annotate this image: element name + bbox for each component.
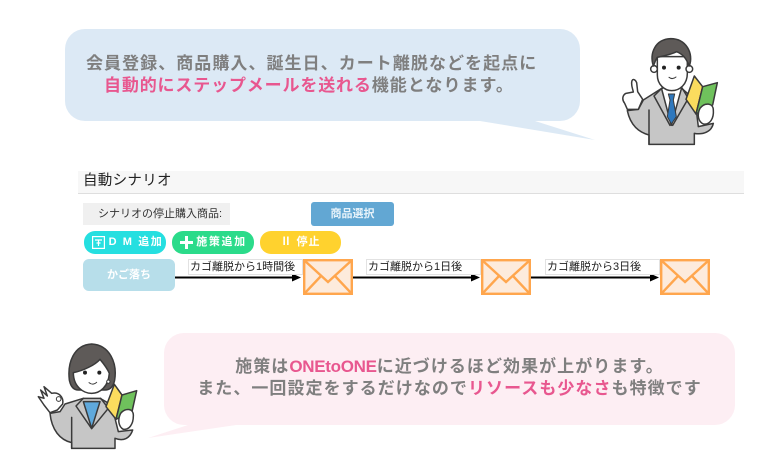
node: cart abandonment: かご落ち bbox=[107, 269, 151, 281]
label: 1 day later: カゴ離脱から1日後 bbox=[368, 261, 462, 273]
text: bottom message: また、一回設定をするだけなのでリソースも少なさも特徴です bbox=[197, 379, 702, 398]
button: add DM: D M 追加 bbox=[109, 236, 163, 248]
button: product select: 商品選択 bbox=[330, 208, 374, 220]
arrows: flow bbox=[175, 275, 659, 282]
label: stop purchase product bbox=[83, 203, 230, 225]
button: stop: Ⅱ 停止 bbox=[280, 236, 321, 248]
label: 1 day later bbox=[366, 259, 481, 275]
panel header: 自動シナリオ bbox=[78, 171, 744, 194]
speech bubble: top bbox=[65, 29, 594, 140]
label: 1 hour later: カゴ離脱から1時間後 bbox=[190, 261, 295, 273]
button: stop bbox=[260, 231, 341, 254]
button: add DM bbox=[84, 231, 166, 254]
label: stop purchase product: シナリオの停止購入商品: bbox=[98, 208, 222, 220]
text: top message bbox=[86, 54, 537, 95]
label: 3 days later bbox=[545, 259, 660, 275]
text: top message: 自動的にステップメールを送れる機能となります。 bbox=[104, 76, 514, 95]
button: add measure: 施策追加 bbox=[196, 236, 247, 248]
button: add measure bbox=[172, 231, 254, 254]
icon: businessman with beginner mark bbox=[622, 38, 718, 146]
panel header: 自動シナリオ: 自動シナリオ bbox=[83, 173, 172, 189]
label: 1 hour later bbox=[188, 259, 303, 275]
node: cart abandonment bbox=[83, 259, 175, 291]
text: top message: 会員登録、商品購入、誕生日、カート離脱などを起点に bbox=[86, 54, 537, 73]
text: bottom message bbox=[197, 357, 702, 398]
icon: businesswoman with beginner mark bbox=[38, 343, 138, 450]
button: product select bbox=[311, 202, 394, 226]
label: 3 days later: カゴ離脱から3日後 bbox=[547, 261, 641, 273]
icon: envelope 1 bbox=[303, 259, 353, 295]
text: bottom message: 施策はONEtoONEに近づけるほど効果が上がります。 bbox=[235, 357, 664, 376]
speech bubble: bottom bbox=[150, 333, 735, 438]
icon: envelope 2 bbox=[481, 259, 531, 295]
panel: scenario screen bbox=[78, 172, 744, 295]
icon: envelope 3 bbox=[660, 259, 710, 295]
